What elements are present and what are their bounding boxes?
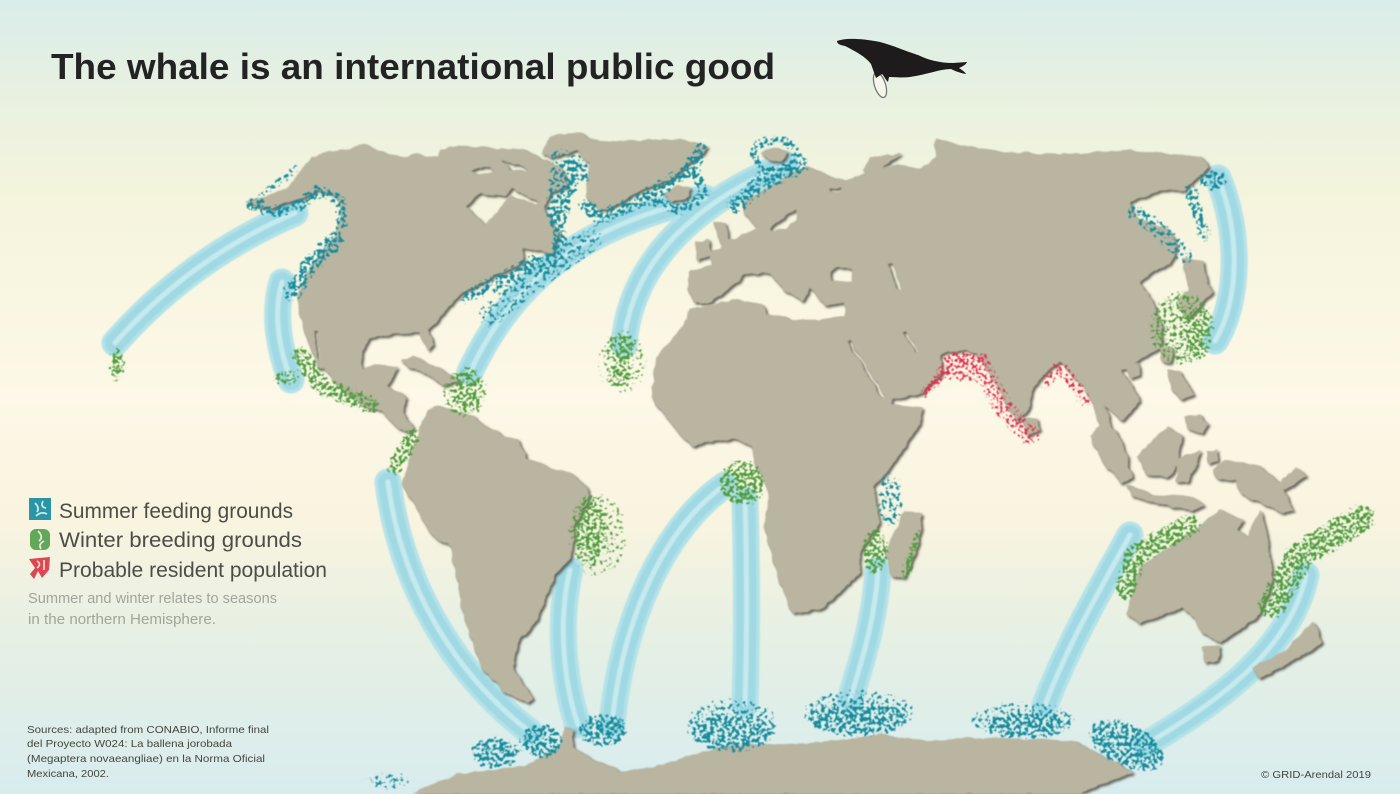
legend item: summer feeding grounds: Summer feeding grounds — [59, 499, 293, 523]
Eurasia and Africa — [652, 140, 1208, 612]
legend note: in the northern Hemisphere. — [28, 612, 216, 628]
winter breeding grounds speckle — [108, 290, 1362, 605]
Australia — [1127, 510, 1272, 642]
icon: humpback whale — [837, 39, 967, 99]
legend note — [28, 591, 277, 628]
New Zealand — [1253, 623, 1322, 678]
British Isles — [696, 222, 733, 263]
legend item: probable resident population: Probable resident population — [59, 558, 327, 582]
Cuba and Hispaniola — [402, 357, 460, 385]
North America with Arctic archipelago — [247, 145, 567, 432]
Greenland — [543, 133, 707, 210]
Madagascar — [886, 512, 921, 578]
probable resident population speckle — [925, 357, 1085, 435]
copyright credit: © GRID-Arendal 2019 — [1261, 769, 1371, 781]
sources text: del Proyecto W024: La ballena jorobada — [27, 738, 232, 750]
Sri Lanka — [1022, 418, 1040, 434]
small East Asian islands — [1125, 347, 1172, 378]
sources text — [27, 724, 269, 780]
New Guinea — [1213, 460, 1305, 513]
sources text: (Megaptera novaeangliae) en la Norma Oficial — [27, 753, 265, 765]
Iceland — [663, 186, 690, 201]
legend note: Summer and winter relates to seasons — [28, 591, 277, 607]
legend — [28, 498, 327, 628]
sources text: Sources: adapted from CONABIO, Informe final — [27, 724, 269, 736]
title: The whale is an international public good — [51, 46, 775, 87]
Japan — [1178, 258, 1213, 318]
South America — [403, 407, 588, 703]
legend item: winter breeding grounds: Winter breeding grounds — [59, 528, 302, 552]
Borneo — [1137, 427, 1182, 477]
Sulawesi and islands — [1177, 415, 1218, 483]
Novaya Zemlya — [864, 154, 900, 176]
Tasmania — [1202, 646, 1220, 662]
Java — [1127, 485, 1203, 510]
Philippines — [1168, 370, 1193, 398]
summer feeding grounds speckle — [250, 140, 1228, 791]
Antarctica — [410, 727, 1133, 794]
sources text: Mexicana, 2002. — [27, 768, 109, 780]
migration routes — [115, 165, 1306, 745]
Svalbard — [763, 148, 787, 160]
world map landmasses — [247, 133, 1322, 794]
